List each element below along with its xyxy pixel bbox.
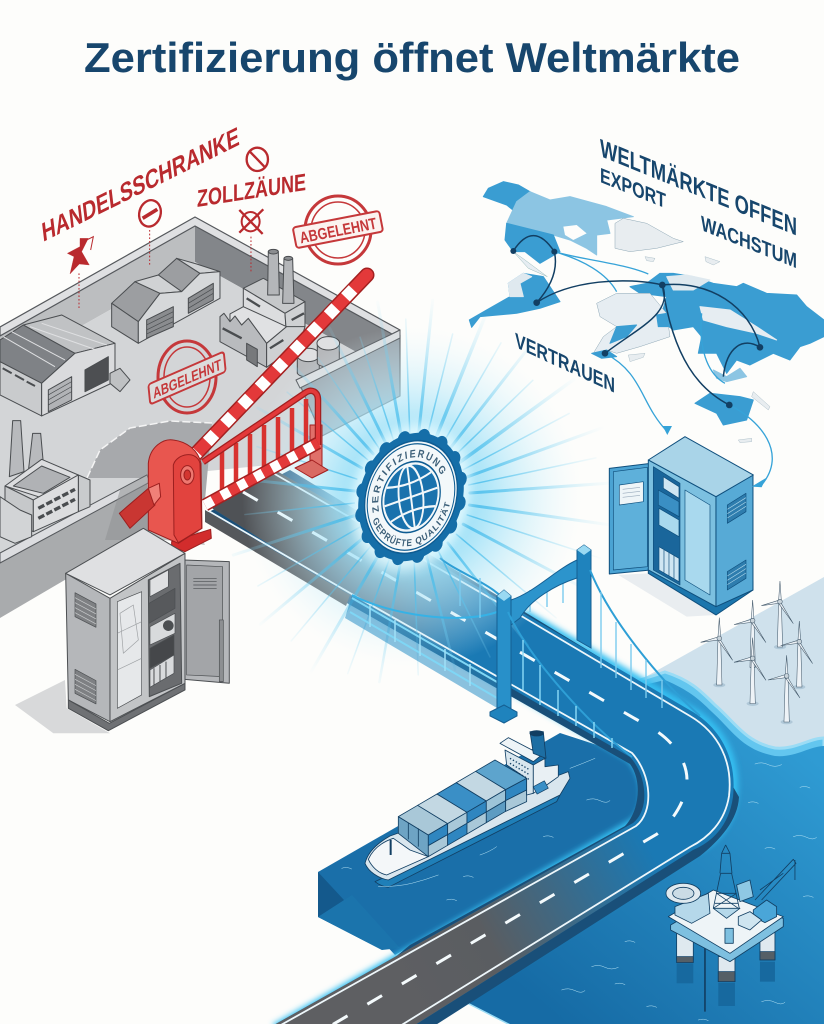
world map with trade routes bbox=[469, 182, 824, 487]
side vents bbox=[727, 493, 746, 590]
side vents bbox=[75, 593, 96, 704]
label: ZOLLZÄUNE: ZOLLZÄUNE bbox=[197, 169, 306, 213]
road glow bbox=[275, 595, 734, 1024]
label: HANDELSSCHRANKE: HANDELSSCHRANKE bbox=[40, 121, 241, 248]
label: VERTRAUEN: VERTRAUEN bbox=[515, 328, 615, 398]
bridge crossbeam bbox=[511, 560, 577, 625]
wind farm bbox=[701, 581, 813, 724]
front right wall of compound bbox=[296, 330, 400, 436]
barrier arm bbox=[190, 275, 367, 460]
interior components bbox=[653, 467, 680, 585]
building: middle warehouse bbox=[112, 258, 220, 343]
stamp: ABGELEHNT upper: ABGELEHNT bbox=[298, 216, 378, 247]
wind turbine 3 bbox=[761, 581, 793, 649]
glass door and interior bbox=[117, 563, 182, 708]
icon: prohibition sign bbox=[247, 148, 268, 171]
stamp: ABGELEHNT lower bbox=[148, 341, 226, 413]
wind turbine 2 bbox=[734, 600, 766, 667]
wind turbine 6 bbox=[768, 655, 800, 724]
wind turbine 1 bbox=[701, 618, 733, 687]
icon: crossed fence sign bbox=[239, 209, 263, 272]
continents bbox=[469, 182, 824, 443]
barrier housing bbox=[119, 440, 211, 552]
building: rear factory with chimneys bbox=[220, 249, 340, 377]
icon: justice figure bbox=[67, 237, 93, 308]
globe icon bbox=[381, 457, 441, 537]
sea with coastline and wind farm land bbox=[463, 577, 824, 1024]
barrier gate with arm, fence and post bbox=[119, 275, 367, 552]
fence post bbox=[295, 425, 328, 478]
label: EXPORT: EXPORT bbox=[600, 163, 666, 213]
route nodes bbox=[510, 248, 763, 408]
arrowheads bbox=[663, 426, 766, 487]
light trade routes bbox=[554, 252, 772, 485]
seal text bbox=[372, 450, 450, 546]
building: front factory with chimneys bbox=[0, 421, 90, 543]
front bridge tower bbox=[490, 590, 517, 723]
container ship bbox=[365, 731, 570, 887]
gray cabinet: closed market equipment bbox=[15, 528, 229, 733]
panel: closed compound with trade barriers bbox=[0, 217, 400, 618]
wind turbine 4 bbox=[781, 621, 813, 689]
road: gray to blue highway bbox=[205, 470, 739, 1024]
blue cabinet: certified equipment bbox=[609, 437, 753, 617]
label: WACHSTUM: WACHSTUM bbox=[701, 211, 797, 273]
offshore oil rig bbox=[666, 845, 796, 1012]
wind turbine 5 bbox=[734, 638, 766, 706]
stamp: ABGELEHNT lower: ABGELEHNT bbox=[152, 356, 223, 403]
icon: minus sign on post bbox=[136, 198, 164, 267]
crane bbox=[755, 859, 796, 900]
red fence bbox=[203, 391, 318, 505]
certification light burst bbox=[233, 300, 612, 682]
sea waves bbox=[342, 758, 817, 1021]
dark trade routes bbox=[513, 236, 760, 405]
seal text: ZERTIFIZIERUNG bbox=[372, 450, 446, 513]
hull bbox=[365, 772, 570, 887]
derrick tower bbox=[713, 845, 740, 918]
title: Zertifizierung öffnet Weltmärkte bbox=[84, 34, 740, 81]
certification seal bbox=[344, 416, 478, 578]
water block below the ship bbox=[318, 733, 648, 955]
seal text: GEPRÜFTE QUALITÄT bbox=[373, 502, 450, 546]
containers bbox=[398, 760, 527, 857]
building: left warehouse bbox=[0, 315, 130, 416]
open door bbox=[183, 560, 229, 683]
rig deck bbox=[666, 880, 783, 962]
stamp: ABGELEHNT upper bbox=[293, 196, 383, 264]
suspension bridge bbox=[345, 545, 700, 757]
open door bbox=[609, 463, 651, 574]
back bridge tower bbox=[577, 545, 591, 648]
bridge superstructure bbox=[500, 731, 558, 795]
glass panel bbox=[685, 490, 710, 595]
rig legs bbox=[677, 932, 775, 1012]
